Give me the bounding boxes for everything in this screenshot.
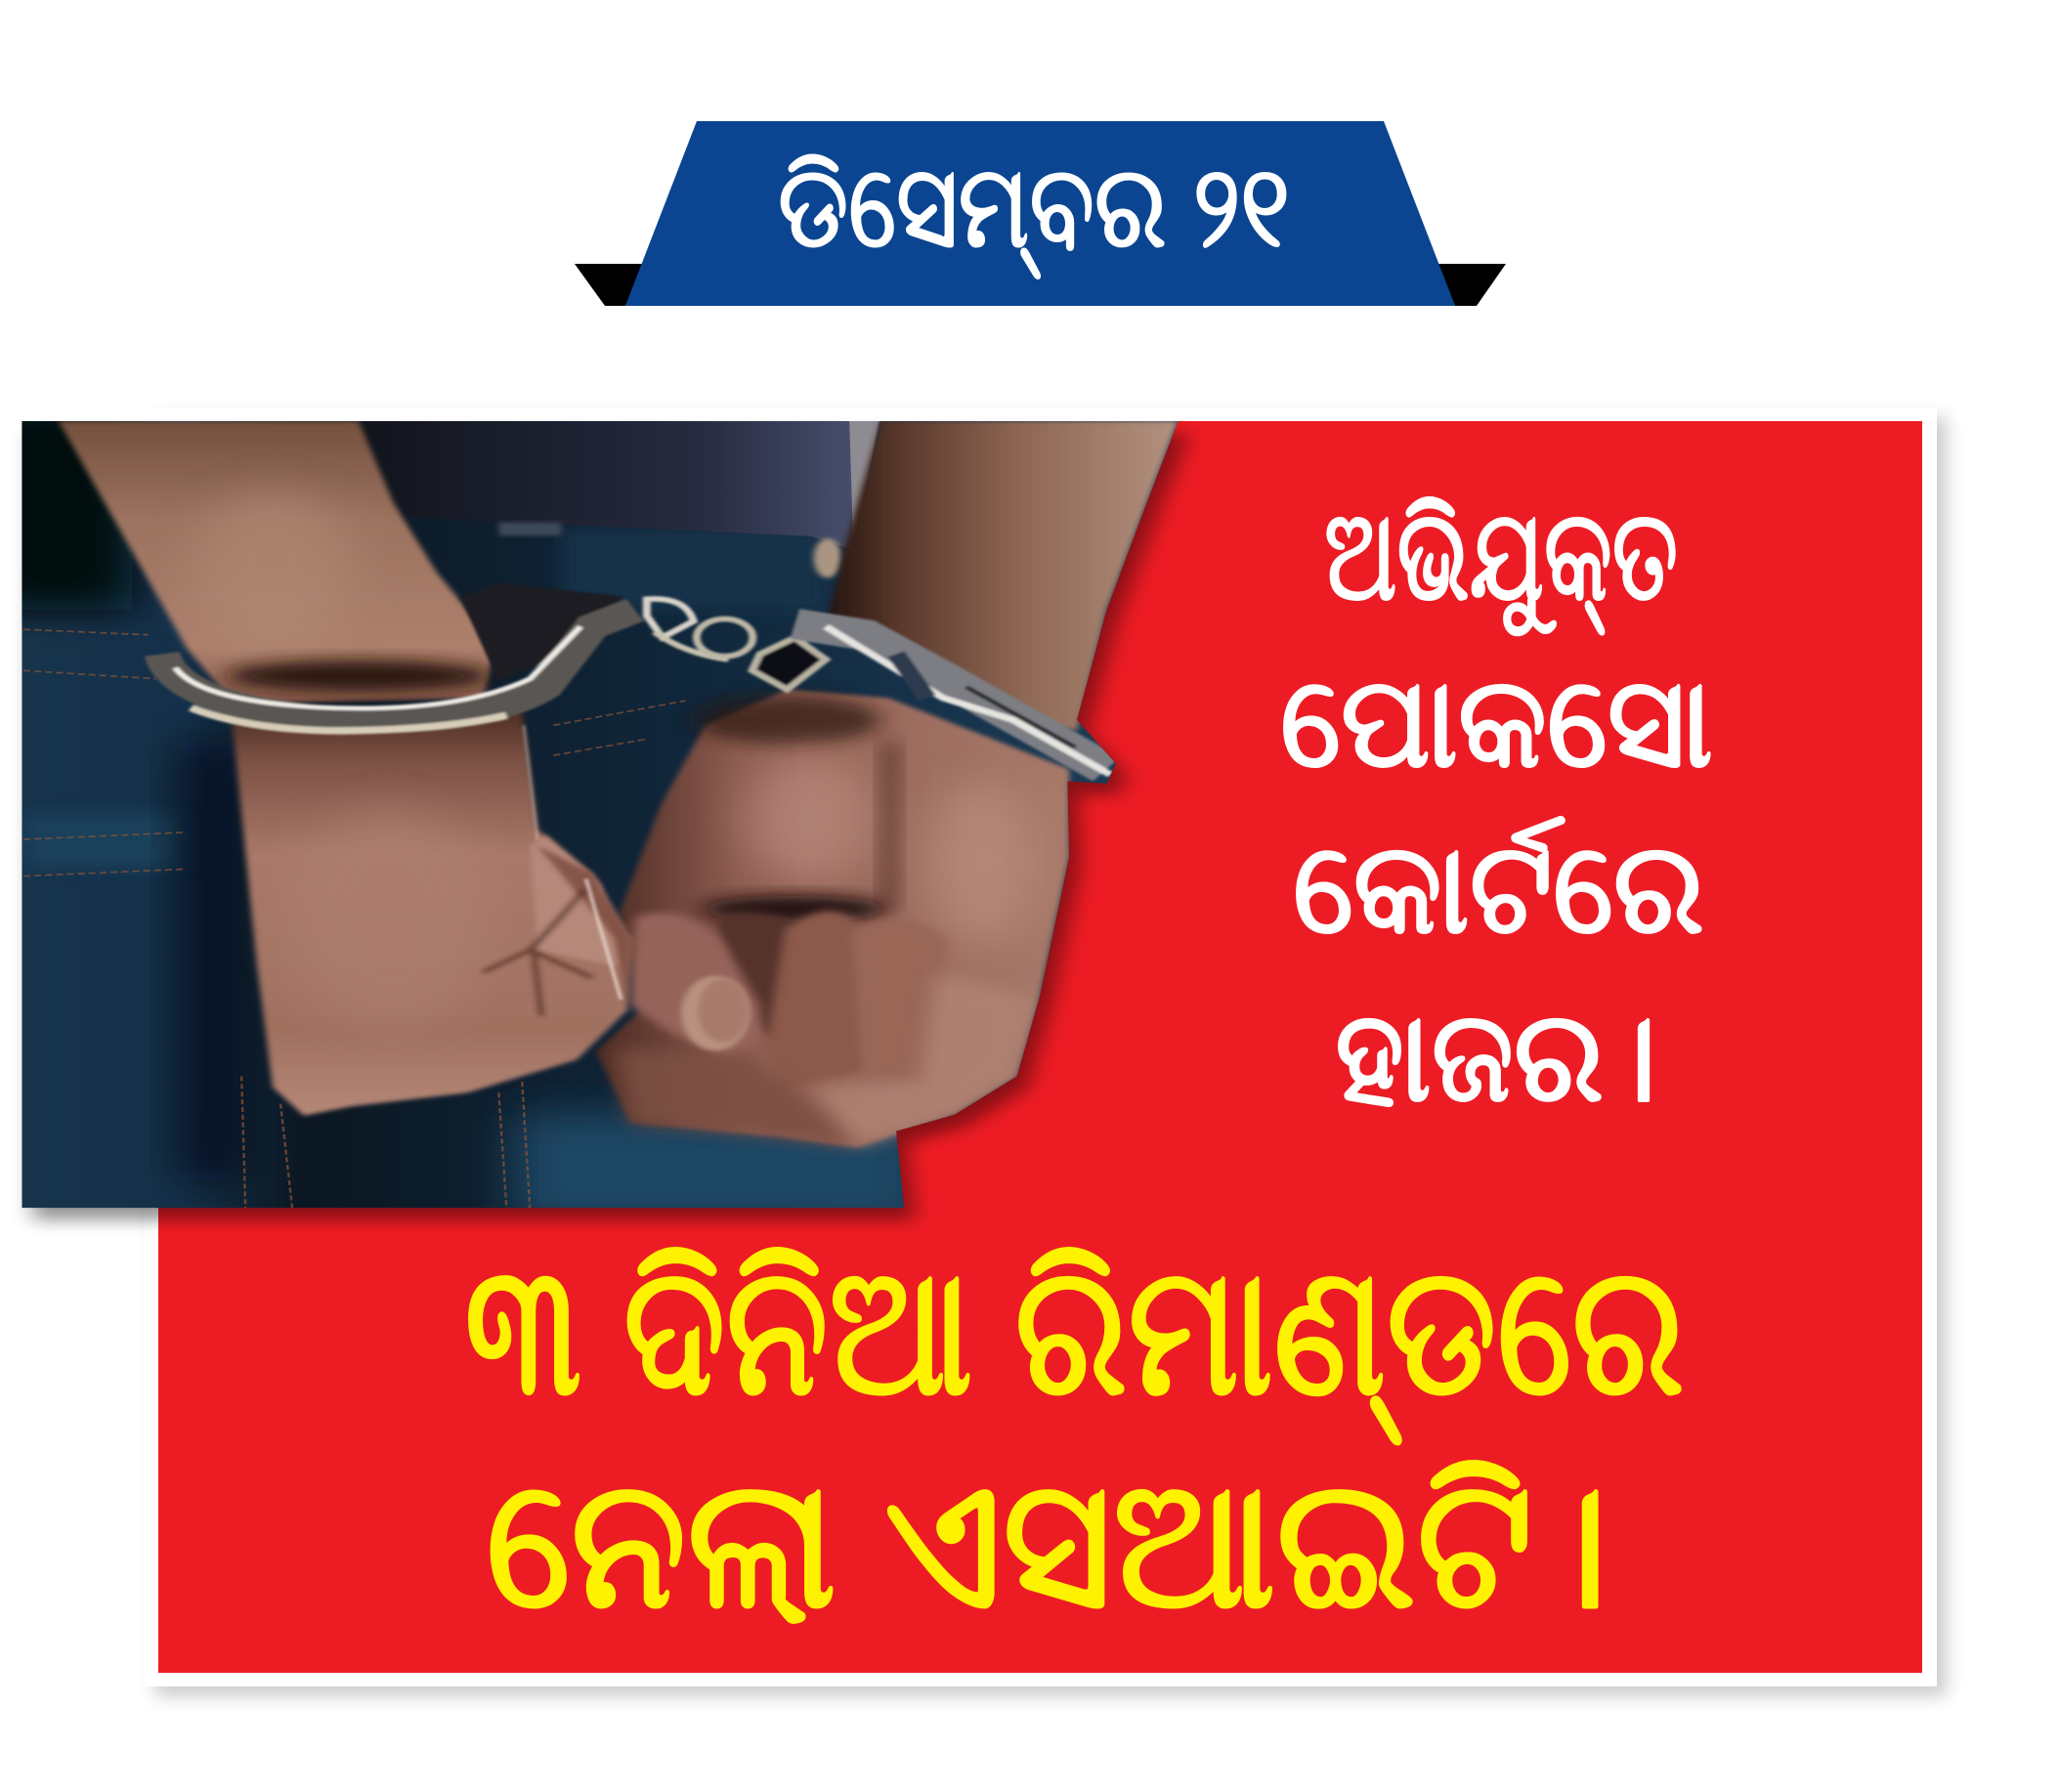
banner date text: ଡିସେମ୍ବର ୨୧ [778, 143, 1290, 277]
yellow line 1: ୩ ଦିନିଆ ରିମାଣ୍ଡରେ [464, 1230, 1685, 1443]
banner trapezoid [625, 121, 1455, 306]
left forearm [59, 421, 493, 704]
jeans background [21, 421, 1190, 1211]
yellow headline block [464, 1230, 1685, 1645]
card white frame [145, 407, 1937, 1686]
banner left ribbon fold [575, 264, 645, 306]
handcuffs [162, 582, 1110, 775]
white line 1: ଅଭିଯୁକ୍ତ [1324, 484, 1678, 634]
yellow line 2: ନେଲା ଏସଆଇଟି। [486, 1443, 1609, 1645]
card shadow [154, 417, 1947, 1696]
date banner [575, 121, 1506, 306]
jeans stitching [23, 629, 686, 1208]
right forearm [826, 421, 1179, 731]
left fist [233, 711, 631, 1116]
white line 3: କୋର୍ଟରେ [1293, 817, 1704, 960]
photo shadow [32, 433, 1189, 1220]
thumb [629, 913, 759, 1054]
panel: red news card [145, 407, 1947, 1696]
photo image content [0, 402, 1190, 1224]
banner right ribbon fold [1437, 264, 1506, 306]
white line 4: ହାଜର। [1335, 985, 1657, 1128]
white line 2: ପୋକସୋ [1280, 651, 1713, 793]
shirt [343, 421, 880, 550]
photo: handcuffed hands [0, 402, 1190, 1224]
white headline block [1280, 484, 1713, 1128]
right fist [596, 690, 1069, 1147]
right fist fingers [773, 907, 862, 1084]
card red background [158, 421, 1922, 1673]
